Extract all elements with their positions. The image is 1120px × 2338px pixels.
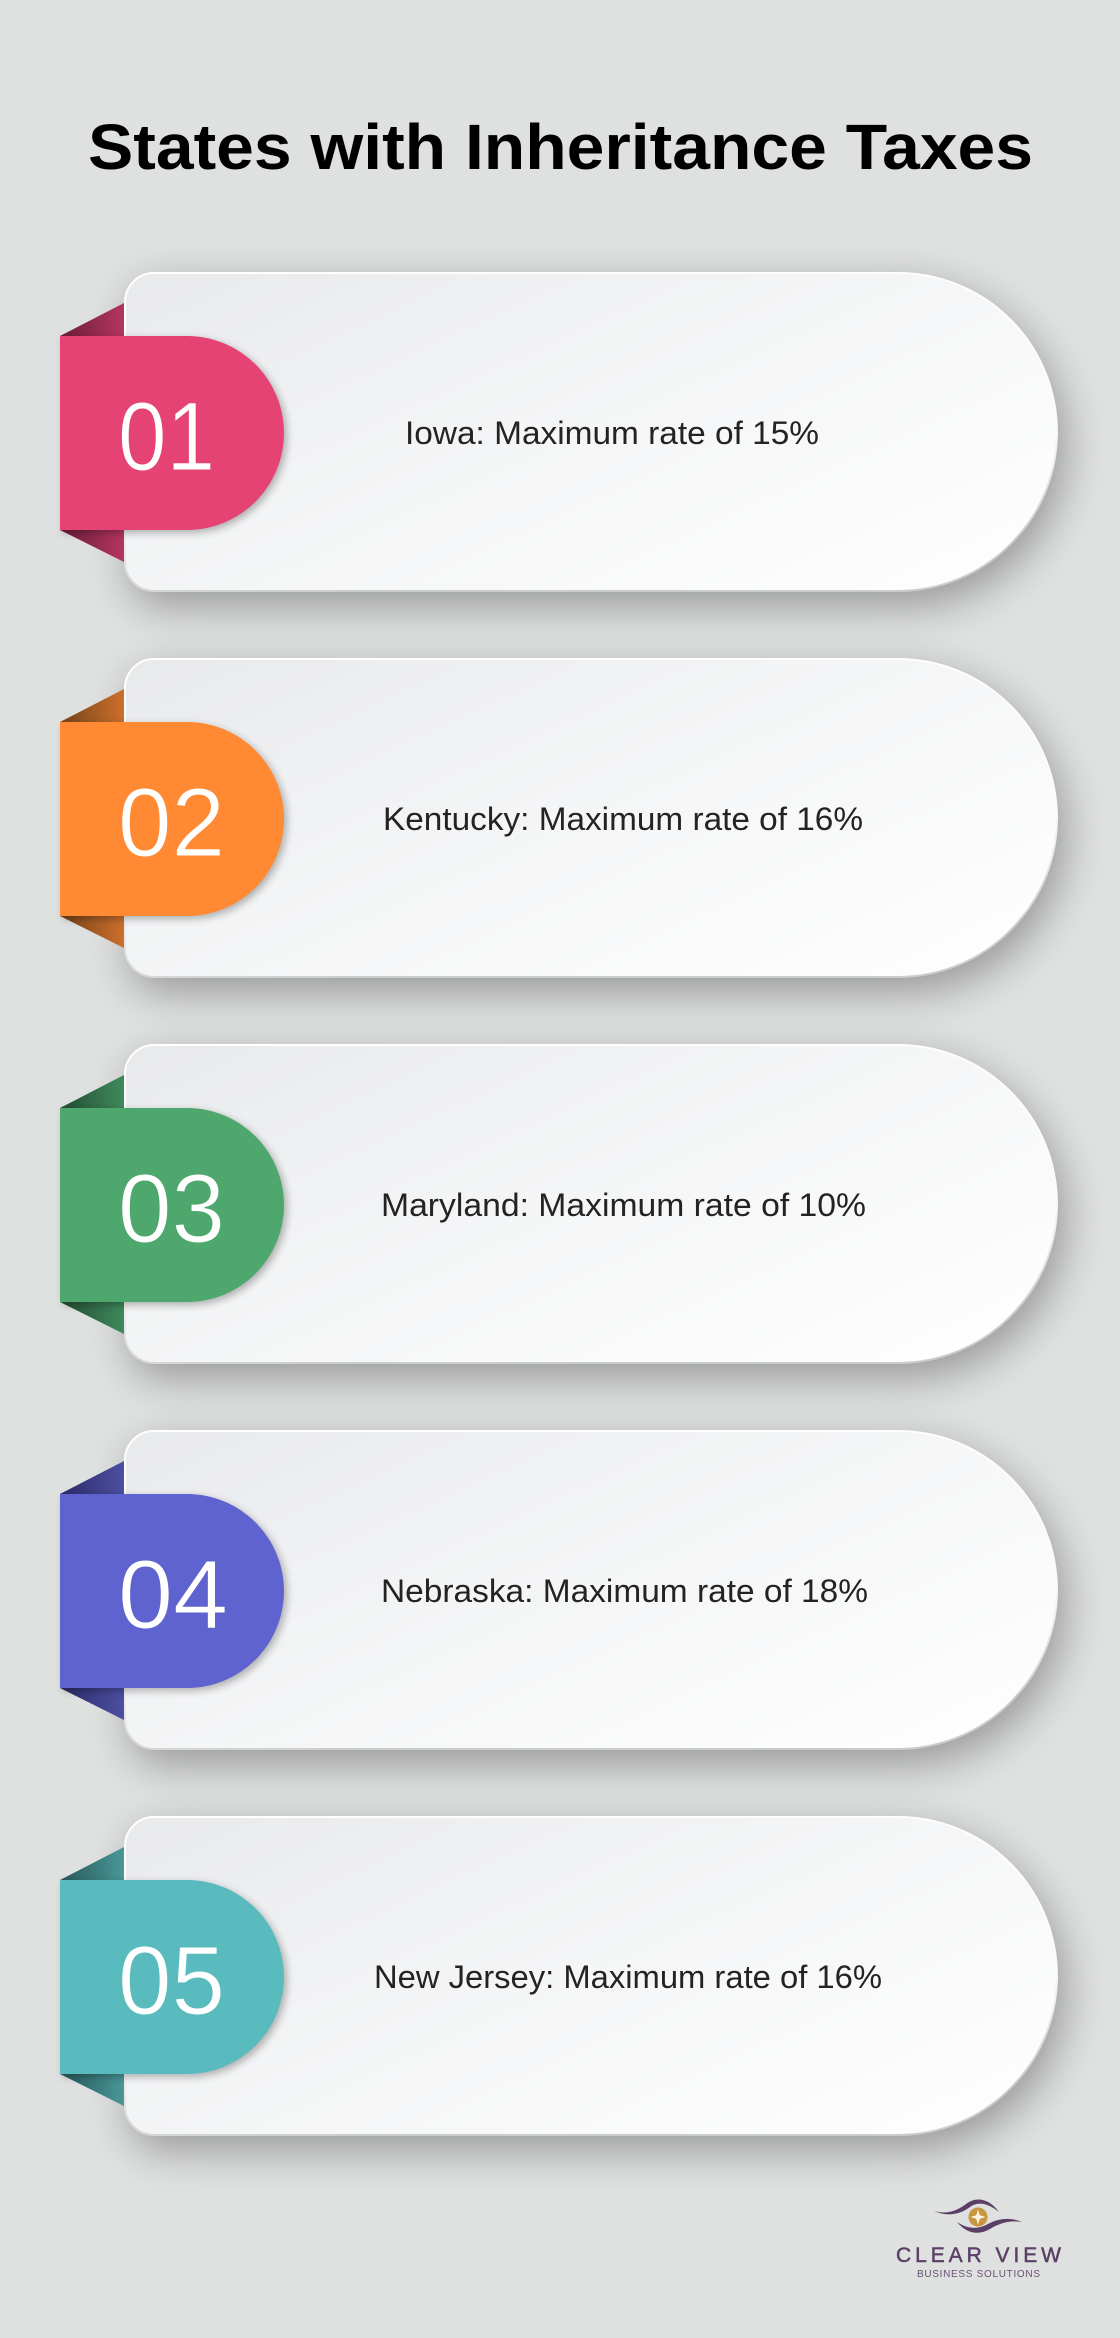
ribbon fold bottom (60, 530, 124, 562)
ribbon fold top (60, 689, 124, 722)
card (125, 1431, 1057, 1749)
card shadow (131, 286, 1065, 606)
badge shadow (63, 1111, 287, 1305)
item text: New Jersey: Maximum rate of 16% (374, 1959, 882, 1995)
badge number: 03 (118, 1154, 225, 1263)
card shadow (131, 1058, 1065, 1378)
panel: New Jersey item (60, 1817, 1065, 2150)
logo: Clear View Business Solutions (896, 2199, 1061, 2280)
icon: eye lower swoosh (957, 2219, 1022, 2233)
panel: Nebraska item (60, 1431, 1065, 1764)
logo wordmark: CLEAR VIEW (896, 2244, 1061, 2267)
badge shadow (63, 1883, 287, 2077)
badge (60, 1494, 284, 1688)
item text: Iowa: Maximum rate of 15% (405, 415, 819, 451)
badge (60, 722, 284, 916)
card (125, 659, 1057, 977)
panel: Iowa item (60, 273, 1065, 606)
badge shadow (63, 339, 287, 533)
ribbon fold top (60, 1847, 124, 1880)
badge (60, 336, 284, 530)
card shadow (131, 1830, 1065, 2150)
ribbon fold bottom (60, 2074, 124, 2106)
badge (60, 1108, 284, 1302)
badge (60, 1880, 284, 2074)
panel: Maryland item (60, 1045, 1065, 1378)
badge number: 01 (118, 382, 215, 491)
ribbon fold top (60, 1075, 124, 1108)
card (125, 1817, 1057, 2135)
ribbon fold top (60, 1461, 124, 1494)
badge number: 02 (118, 768, 225, 877)
icon: star glint (970, 2210, 986, 2224)
item text: Nebraska: Maximum rate of 18% (381, 1573, 868, 1609)
ribbon fold bottom (60, 916, 124, 948)
badge number: 04 (118, 1540, 228, 1649)
icon: eye upper swoosh (934, 2199, 999, 2214)
ribbon fold bottom (60, 1688, 124, 1720)
badge shadow (63, 1497, 287, 1691)
ribbon fold bottom (60, 1302, 124, 1334)
card (125, 273, 1057, 591)
badge shadow (63, 725, 287, 919)
icon: gold iris (968, 2208, 988, 2226)
card (125, 1045, 1057, 1363)
ribbon fold top (60, 303, 124, 336)
logo tagline: BUSINESS SOLUTIONS (917, 2269, 1040, 2280)
badge number: 05 (118, 1926, 225, 2035)
title: States with Inheritance Taxes (88, 111, 1033, 183)
card shadow (131, 1444, 1065, 1764)
item text: Kentucky: Maximum rate of 16% (383, 801, 863, 837)
panel: Kentucky item (60, 659, 1065, 992)
item text: Maryland: Maximum rate of 10% (381, 1187, 866, 1223)
card shadow (131, 672, 1065, 992)
